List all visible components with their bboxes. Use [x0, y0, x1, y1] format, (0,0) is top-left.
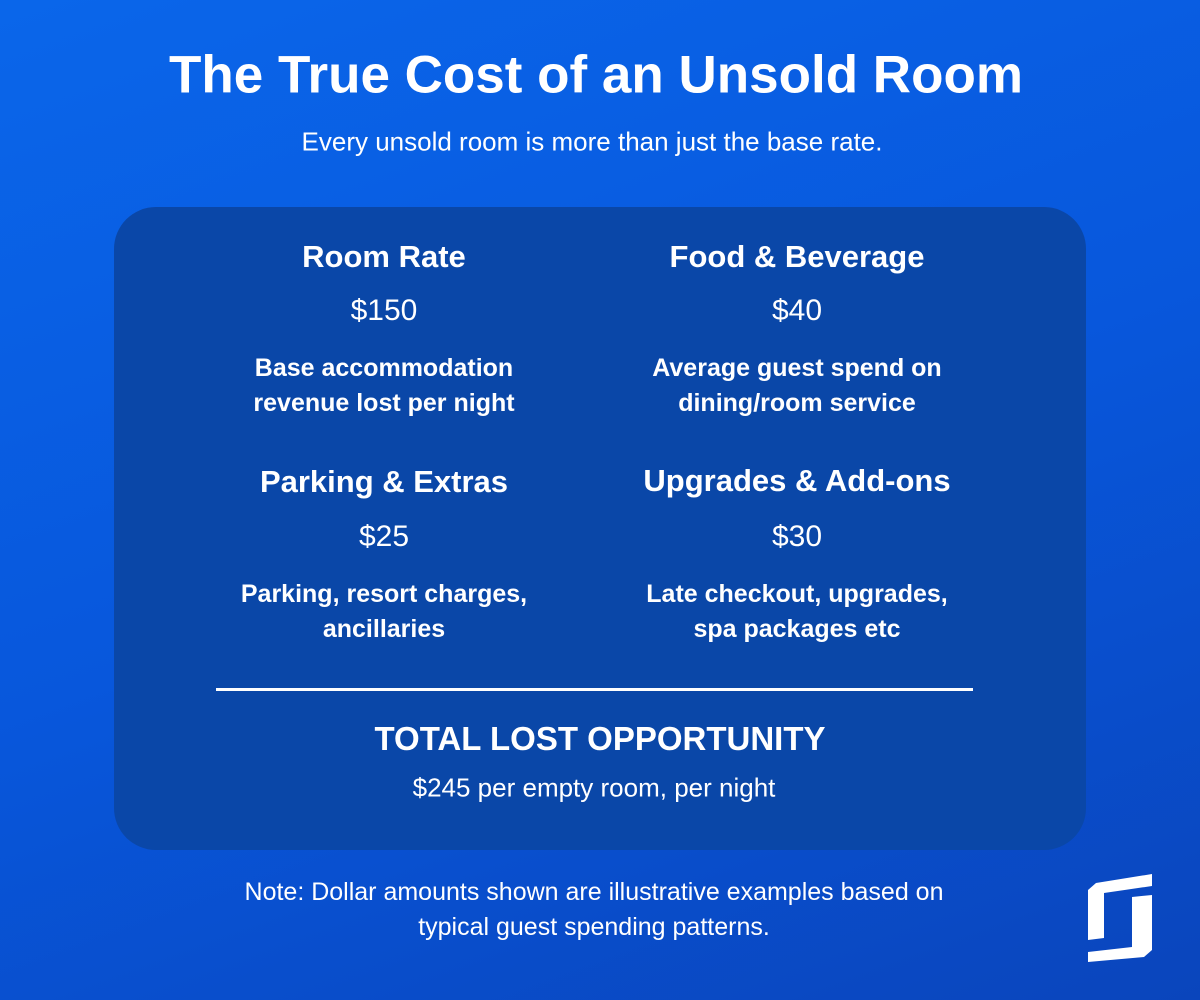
item: food & beverage: dining/room service [678, 389, 916, 417]
item: food & beverage: $40 [772, 294, 822, 327]
item: parking & extras: ancillaries [323, 615, 445, 643]
subtitle: Every unsold room is more than just the base rate. [302, 126, 882, 156]
note [245, 878, 943, 941]
item: parking & extras: Parking & Extras [260, 464, 508, 499]
item: upgrades & add-ons: $30 [772, 520, 822, 553]
total value: $245 per empty room, per night [413, 772, 775, 802]
item: room rate: Base accommodation [255, 354, 513, 382]
item: parking & extras [241, 464, 527, 643]
item: room rate: revenue lost per night [253, 389, 515, 417]
item: food & beverage: Average guest spend on [652, 354, 942, 382]
item: room rate: Room Rate [302, 239, 466, 274]
note: Note: Dollar amounts shown are illustrative examples based on [245, 878, 943, 906]
item: parking & extras: Parking, resort charges, [241, 580, 527, 608]
item: room rate: $150 [351, 294, 417, 327]
item: food & beverage [652, 239, 942, 417]
note: typical guest spending patterns. [418, 913, 770, 941]
item: room rate [253, 239, 515, 417]
item: upgrades & add-ons: Upgrades & Add-ons [643, 463, 951, 498]
item: parking & extras: $25 [359, 520, 409, 553]
item: upgrades & add-ons: Late checkout, upgrades, [646, 580, 948, 608]
item: upgrades & add-ons: spa packages etc [693, 615, 901, 643]
total heading: TOTAL LOST OPPORTUNITY [374, 720, 826, 757]
panel: cost breakdown [114, 207, 1086, 850]
title: The True Cost of an Unsold Room [169, 46, 1023, 104]
icon: logo [1088, 874, 1152, 962]
item: upgrades & add-ons [643, 463, 951, 643]
item: food & beverage: Food & Beverage [670, 239, 924, 274]
